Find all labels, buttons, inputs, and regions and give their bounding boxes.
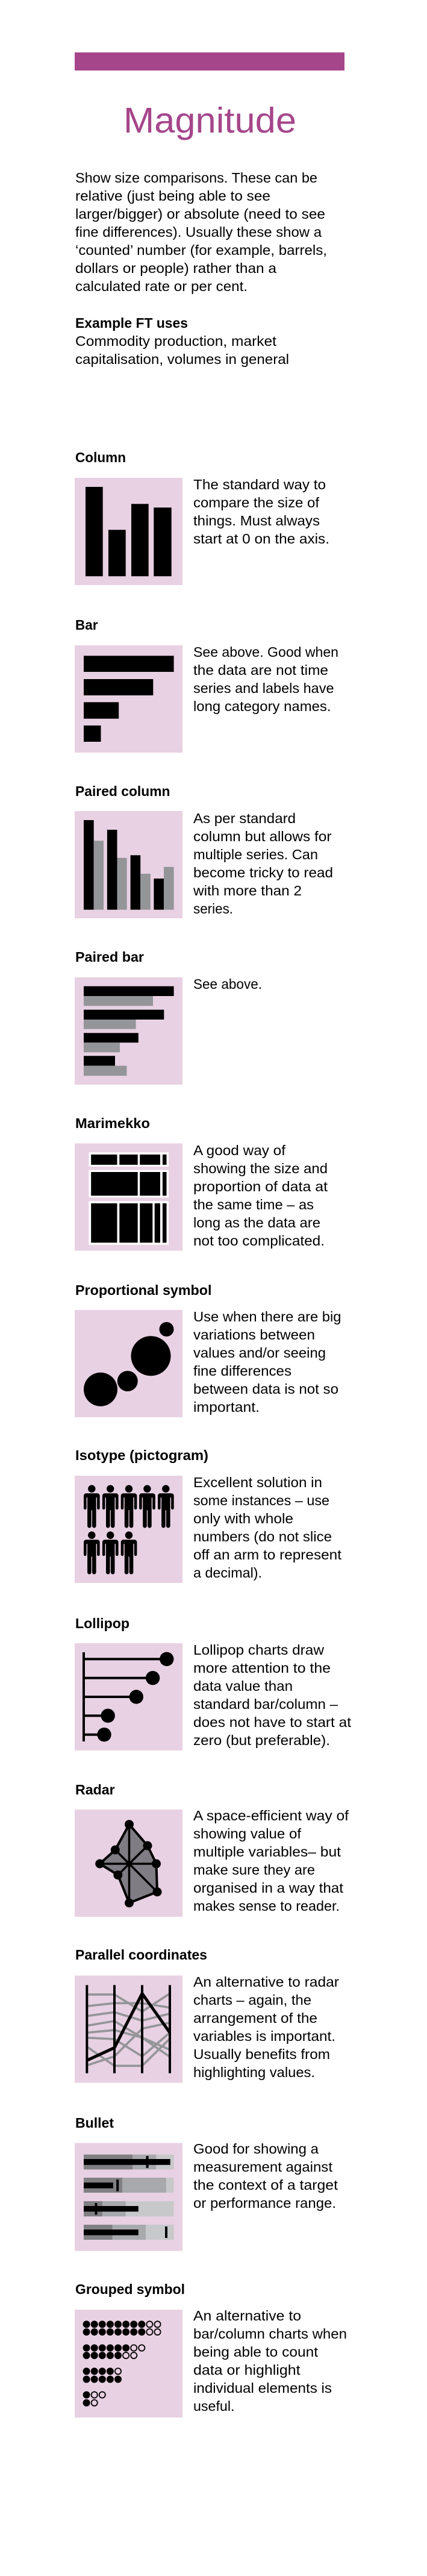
description: column: The standard way to [193,477,326,492]
heading: radar: Radar [75,1782,115,1797]
heading: paired bar: Paired bar [75,949,144,965]
description: lollipop: standard bar/column – [193,1696,338,1712]
description: radar [193,1808,349,1914]
description: grouped symbol: bar/column charts when [193,2326,347,2342]
intro text block: relative (just being able to see [75,188,270,204]
description: paired bar: See above. [193,976,262,992]
description: bar [193,644,338,714]
icon: marimekko chart [75,1144,182,1251]
description: parallel coordinates: An alternative to radar [193,1974,339,1990]
description: paired column: series. [193,901,233,917]
description: isotype [193,1474,341,1581]
panel: grouped symbol [75,2281,347,2418]
description: marimekko: A good way of [193,1142,285,1158]
heading: isotype: Isotype (pictogram) [75,1447,208,1463]
intro text block: fine differences). Usually these show a [75,224,322,240]
icon: radar chart [75,1810,182,1917]
icon: column chart [75,478,182,585]
description: bar: series and labels have [193,680,334,696]
icon: grouped symbol chart [75,2310,182,2418]
description: parallel coordinates: highlighting values. [193,2064,315,2080]
description: column: start at 0 on the axis. [193,531,329,547]
description: marimekko: not too complicated. [193,1233,325,1249]
description: marimekko: long as the data are [193,1215,320,1230]
description: parallel coordinates [193,1974,339,2080]
panel: paired column [75,783,333,918]
description: lollipop: data value than [193,1678,293,1694]
description: column: compare the size of [193,495,319,510]
heading: bar: Bar [75,617,98,633]
description: marimekko: proportion of data at [193,1179,328,1194]
description: bullet [193,2141,338,2211]
panel: radar [75,1782,349,1917]
description: marimekko: showing the size and [193,1161,328,1176]
icon: isotype pictogram [75,1476,182,1583]
example FT uses text block: Commodity production, market [75,333,276,349]
description: bullet: Good for showing a [193,2141,319,2157]
description: grouped symbol: data or highlight [193,2362,301,2378]
description: parallel coordinates: arrangement of the [193,2010,317,2026]
description: bullet: or performance range. [193,2195,336,2211]
description: marimekko [193,1142,328,1249]
description: proportional symbol: important. [193,1399,260,1415]
description: bar: the data are not time [193,662,328,678]
panel: proportional symbol [75,1282,341,1417]
description: isotype: a decimal). [193,1565,262,1581]
description: proportional symbol [193,1309,341,1415]
description: parallel coordinates: variables is important. [193,2028,335,2044]
description: radar: multiple variables– but [193,1844,341,1860]
description: lollipop: Lollipop charts draw [193,1642,325,1658]
description: paired column: multiple series. Can [193,847,318,862]
heading: parallel coordinates: Parallel coordinates [75,1947,207,1963]
intro text block: ‘counted’ number (for example, barrels, [75,242,327,258]
panel: parallel coordinates [75,1947,339,2082]
description: column: things. Must always [193,513,320,528]
description: grouped symbol: individual elements is [193,2380,332,2396]
description: paired column: become tricky to read [193,865,333,880]
description: proportional symbol: fine differences [193,1363,291,1379]
description: bullet: the context of a target [193,2177,338,2193]
description: radar: organised in a way that [193,1880,343,1896]
description: proportional symbol: values and/or seeing [193,1345,326,1361]
panel: paired bar [75,949,262,1085]
description: proportional symbol: Use when there are big [193,1309,341,1324]
panel: marimekko [75,1115,328,1251]
description: column [193,477,329,547]
icon: proportional symbol chart [75,1310,182,1417]
example FT uses text block: capitalisation, volumes in general [75,351,289,367]
heading: paired column: Paired column [75,783,170,799]
description: grouped symbol: being able to count [193,2344,318,2360]
description: paired column [193,810,333,917]
panel: column [75,450,329,585]
description: parallel coordinates: charts – again, the [193,1992,311,2008]
description: grouped symbol: useful. [193,2398,235,2414]
intro text block: dollars or people) rather than a [75,260,277,276]
description: paired column: column but allows for [193,829,332,844]
description: isotype: Excellent solution in [193,1474,322,1490]
description: lollipop: zero (but preferable). [193,1732,330,1748]
description: radar: showing value of [193,1826,301,1841]
description: radar: make sure they are [193,1862,315,1878]
description: lollipop [193,1642,351,1748]
heading: lollipop: Lollipop [75,1615,129,1631]
icon: bullet chart [75,2143,182,2251]
intro text block: Show size comparisons. These can be [75,170,317,186]
panel: isotype [75,1447,341,1583]
heading: marimekko: Marimekko [75,1115,150,1131]
intro text block: calculated rate or per cent. [75,278,248,294]
title: Magnitude [123,101,296,140]
icon: paired bar chart [75,977,182,1085]
intro text block: larger/bigger) or absolute (need to see [75,206,325,222]
description: radar: makes sense to reader. [193,1898,340,1914]
description: lollipop: more attention to the [193,1660,331,1676]
description: parallel coordinates: Usually benefits from [193,2046,330,2062]
description: isotype: numbers (do not slice [193,1529,332,1544]
description: bar: long category names. [193,698,331,714]
description: grouped symbol: An alternative to [193,2308,301,2324]
panel: bar [75,617,338,753]
icon: lollipop chart [75,1643,182,1750]
description: isotype: off an arm to represent [193,1547,341,1562]
heading: column: Column [75,450,126,465]
banner bar [75,52,344,71]
description: proportional symbol: between data is not so [193,1381,338,1397]
panel: lollipop [75,1615,351,1750]
example FT uses text block [75,315,289,367]
description: radar: A space-efficient way of [193,1808,349,1823]
description: bullet: measurement against [193,2159,332,2175]
icon: paired column chart [75,811,182,918]
description: bar: See above. Good when [193,644,338,660]
icon: parallel coordinates chart [75,1975,182,2082]
description: isotype: some instances – use [193,1493,329,1508]
description: isotype: only with whole [193,1511,293,1526]
icon: bar chart [75,645,182,753]
description: marimekko: the same time – as [193,1197,314,1212]
example FT uses text block: Example FT uses [75,315,188,331]
description: proportional symbol: variations between [193,1327,315,1343]
heading: bullet: Bullet [75,2115,114,2131]
intro text block [75,170,327,294]
description: paired column: with more than 2 [193,883,302,898]
description: lollipop: does not have to start at [193,1714,351,1730]
description: grouped symbol [193,2308,347,2414]
heading: proportional symbol: Proportional symbol [75,1282,212,1298]
heading: grouped symbol: Grouped symbol [75,2281,185,2297]
description: paired column: As per standard [193,810,296,826]
panel: bullet [75,2115,338,2251]
